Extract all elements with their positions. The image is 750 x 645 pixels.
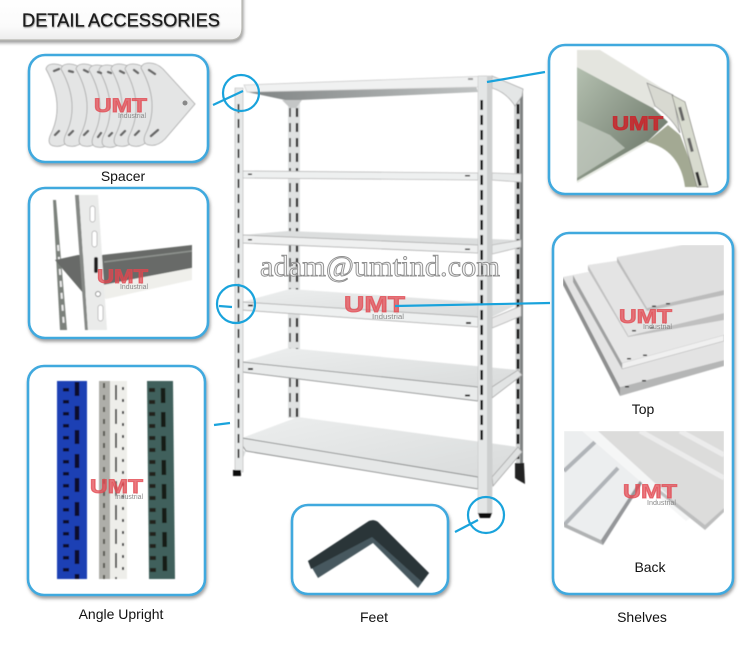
watermark — [94, 96, 148, 120]
label: shelves: Shelves — [617, 609, 667, 625]
back left post — [288, 97, 300, 418]
watermark: top: UMT — [619, 307, 673, 328]
heading tab: detail accessories — [0, 0, 242, 40]
central watermark logo — [344, 292, 406, 321]
shelf 1 top — [244, 76, 523, 108]
gusset plate — [647, 83, 680, 133]
callout: top corner — [487, 72, 545, 82]
watermark: Industrial — [118, 113, 146, 120]
shelf edge — [577, 50, 673, 108]
callout: angle upright — [214, 423, 230, 425]
shelf underside — [55, 245, 192, 299]
watermark email: adam@umtind.com — [260, 250, 500, 283]
panel: shelves — [553, 233, 733, 594]
dark green upright — [147, 381, 175, 579]
corner bracket — [647, 125, 700, 187]
watermark: back: UMT — [623, 482, 678, 503]
white upright — [99, 381, 127, 579]
panel: feet — [292, 505, 448, 594]
callout lines and circles — [213, 72, 550, 533]
watermark: UMT — [94, 96, 148, 117]
label: feet: Feet — [360, 609, 388, 625]
rear upright — [53, 200, 67, 330]
callout: spacer — [213, 75, 259, 111]
panel: spacer — [29, 55, 208, 162]
label: top: Top — [632, 401, 654, 417]
spacer slots — [54, 69, 158, 137]
shelf 6 bottom — [236, 417, 522, 500]
spacer plates — [46, 63, 195, 147]
watermark: back — [623, 482, 678, 507]
watermark: UMT — [97, 267, 148, 288]
watermark: back: Industrial — [647, 500, 676, 507]
watermark: UMT — [612, 114, 663, 135]
underside of shelf — [577, 67, 668, 182]
shelf 3 — [242, 231, 521, 254]
panel: top corner detail — [549, 45, 728, 194]
label: back: Back — [634, 559, 667, 575]
shelf 2 — [242, 171, 521, 182]
callout: shelves — [395, 303, 550, 306]
watermark: top — [619, 307, 673, 331]
foot icon — [308, 520, 429, 588]
label: angle upright: Angle Upright — [79, 606, 164, 622]
front upright — [75, 195, 107, 330]
central watermark logo: UMT — [344, 292, 406, 317]
front right post — [478, 76, 492, 518]
upright post — [672, 95, 708, 187]
label: spacer: Spacer — [101, 168, 146, 184]
central shelving unit — [233, 76, 525, 518]
heading tab: detail accessories: DETAIL ACCESSORIES — [22, 10, 220, 30]
blue upright — [57, 381, 87, 579]
watermark: Industrial — [115, 494, 143, 501]
watermark: UMT — [90, 477, 144, 498]
back right post — [514, 90, 525, 484]
shelf 5 — [242, 348, 522, 401]
panel: angle upright — [28, 366, 205, 595]
callout: shelf joint — [217, 285, 255, 323]
watermark: top: Industrial — [643, 324, 672, 331]
shelf 4 — [242, 289, 521, 328]
front left post — [233, 88, 243, 476]
watermark: Industrial — [120, 284, 148, 291]
back view of shelves — [564, 431, 724, 545]
watermark — [90, 477, 144, 501]
watermark — [97, 267, 148, 291]
panel: shelf joint — [29, 188, 208, 338]
top view of stacked shelves — [563, 245, 724, 396]
central watermark logo: Industrial — [372, 314, 404, 321]
callout: feet — [455, 497, 504, 533]
